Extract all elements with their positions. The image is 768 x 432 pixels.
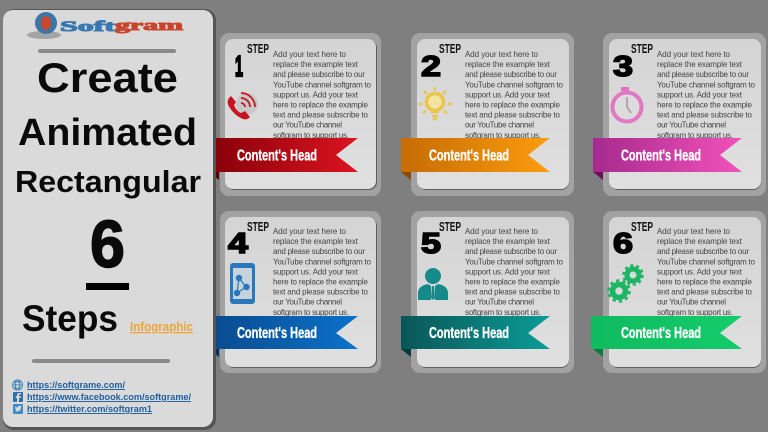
step label: STEP [439,220,461,234]
body text: our YouTube channel [657,121,726,130]
card: step 5 [401,211,574,373]
icon: light bulb [419,87,452,119]
link: facebook: https://www.facebook.com/softgrame/ [27,392,191,403]
ribbon: Content's Head [621,148,701,164]
body text: support us. Add your text [273,90,359,99]
panel: title sidebar [3,9,216,430]
label: Infographic: Infographic [130,320,193,334]
body text: support us. Add your text [273,267,359,276]
card: step 1: 1 [235,51,243,83]
body text: here to replace the example [657,100,753,110]
body text: YouTube channel softgram to [465,80,564,89]
step label: STEP [631,42,653,56]
link: website: https://softgrame.com/ [27,380,125,391]
icon: stopwatch [612,87,642,122]
body text: text and please subscribe to [465,288,561,297]
body text: YouTube channel softgram to [273,257,372,266]
step label: STEP [247,220,269,234]
title: big 6: 6 [90,207,125,282]
card frame [411,33,574,196]
body text: support us. Add your text [465,90,551,99]
title: Animated: Animated [18,112,197,154]
body text: softgram to support us. [273,308,349,317]
ribbon: Content's Head [429,148,509,164]
ribbon: Content's Head [621,325,701,342]
body text: text and please subscribe to [273,111,369,120]
body text: support us. Add your text [465,267,551,276]
panel body [3,9,216,430]
body text: here to replace the example [465,278,561,286]
body text: YouTube channel softgram to [273,80,372,89]
body text: our YouTube channel [273,298,342,307]
logo [27,12,184,39]
divider [38,49,176,53]
step number: 5 [421,228,441,260]
card: step 6 [591,211,766,373]
ribbon [593,138,742,180]
body text: our YouTube channel [657,298,726,307]
card frame [603,33,766,196]
body text: replace the example text [465,237,551,246]
body text: text and please subscribe to [273,288,369,297]
body text: softgram to support us. [465,131,541,140]
body text: YouTube channel softgram to [657,80,756,89]
icon: smartphone network [230,263,255,304]
body text: and please subscribe to our [465,247,557,256]
body text: replace the example text [465,60,551,69]
body text: here to replace the example [273,100,369,110]
card frame [220,211,381,373]
card: step 3 [593,33,766,196]
ribbon [401,316,550,357]
body text: and please subscribe to our [273,247,365,256]
body text: text and please subscribe to [657,288,753,297]
icon: twitter [13,404,23,414]
body text: our YouTube channel [465,298,534,307]
icon: business person [418,268,448,300]
body text: Add your text here to [465,50,539,59]
body text: here to replace the example [657,278,753,286]
body text: YouTube channel softgram to [465,257,564,266]
divider [32,359,170,363]
body text: softgram to support us. [465,308,541,317]
step label: STEP [631,220,653,234]
ribbon [209,138,358,180]
body text: softgram to support us. [657,308,733,317]
body text: and please subscribe to our [465,70,557,79]
body text: YouTube channel softgram to [657,257,756,266]
title: Rectangular: Rectangular [15,164,201,199]
icon: gears [608,266,642,302]
body text: our YouTube channel [273,121,342,130]
card: step 4 [209,211,381,373]
body text: Add your text here to [273,227,347,236]
logo: Soft [60,19,115,35]
body text: here to replace the example [273,278,369,286]
body text: Add your text here to [657,227,731,236]
ribbon: Content's Head [429,325,509,342]
body text: text and please subscribe to [465,111,561,120]
title: Steps: Steps [22,298,118,339]
logo: gram [115,18,184,34]
body text: softgram to support us. [273,131,349,140]
card: step 2 [401,33,574,196]
body text: softgram to support us. [657,131,733,140]
icon: globe [12,380,22,390]
body text: replace the example text [273,60,359,69]
body text: and please subscribe to our [657,247,749,256]
step label: STEP [247,42,269,56]
ribbon: Content's Head [237,325,317,342]
body text: Add your text here to [273,50,347,59]
body text: and please subscribe to our [657,70,749,79]
step number: 2 [421,51,441,83]
step number: 6 [613,228,633,260]
ribbon [401,138,550,180]
body text: support us. Add your text [657,90,743,99]
link: twitter: https://twitter.com/softgram1 [27,404,153,415]
icon: facebook [13,392,23,402]
card frame [603,211,766,373]
body text: text and please subscribe to [657,111,753,120]
body text: Add your text here to [465,227,539,236]
ribbon [209,316,358,357]
body text: and please subscribe to our [273,70,365,79]
step number: 4 [228,228,248,260]
step number: 3 [613,51,633,83]
body text: Add your text here to [657,50,731,59]
body text: here to replace the example [465,100,561,110]
ribbon: Content's Head [237,148,317,164]
card: step 1 [209,33,381,196]
title: Create: Create [37,54,178,101]
body text: replace the example text [657,60,743,69]
step label: STEP [439,42,461,56]
body text: support us. Add your text [657,267,743,276]
body text: replace the example text [273,237,359,246]
underline of 6 [86,283,129,290]
card frame [220,33,381,196]
icon: phone [228,93,258,119]
ribbon [591,316,742,357]
card frame [411,211,574,373]
body text: our YouTube channel [465,121,534,130]
body text: replace the example text [657,237,743,246]
